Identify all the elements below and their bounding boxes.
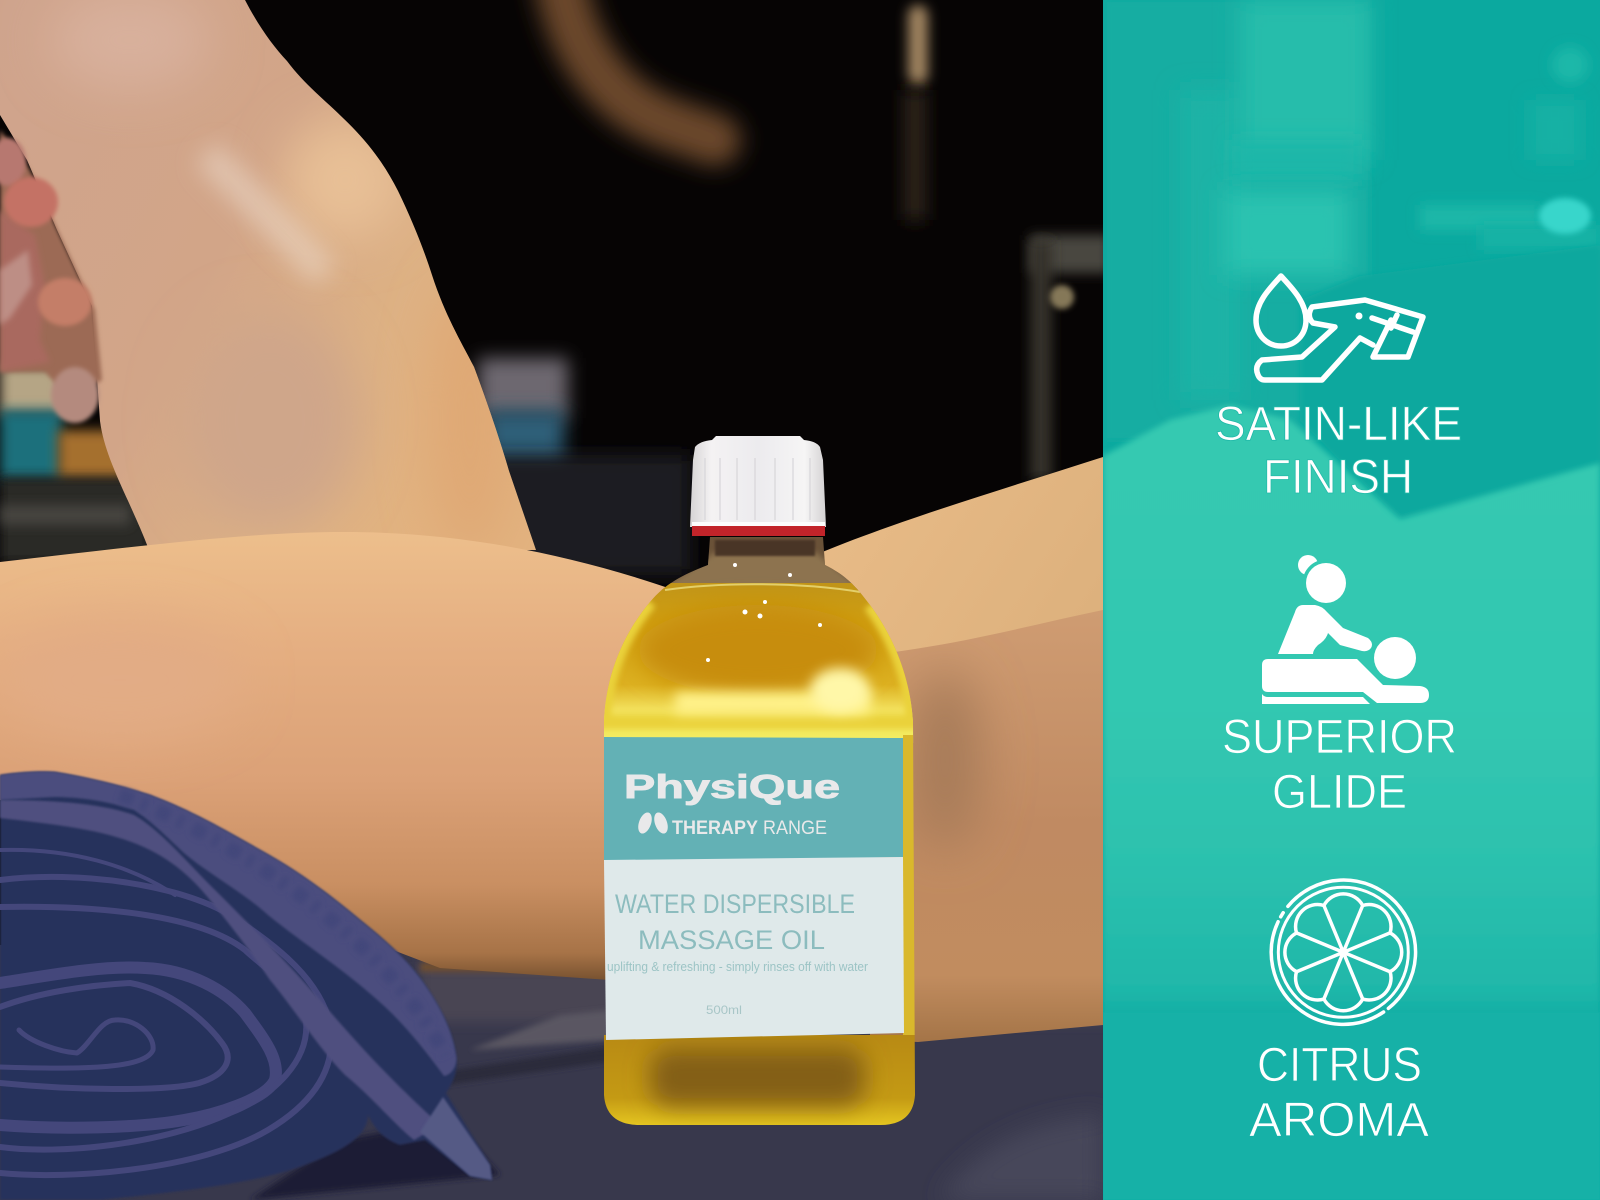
label: brand band	[604, 737, 903, 862]
towel roll folds	[0, 850, 331, 1175]
massage table	[0, 945, 1120, 1200]
photo: massage scene with oil bottle	[0, 0, 1120, 1200]
thigh in the foreground	[0, 525, 690, 1005]
icon: oil drop over hand	[1256, 276, 1423, 380]
towel top flap	[0, 772, 456, 1076]
benefit: satin-like finish	[1215, 276, 1462, 504]
towel edge fold	[0, 800, 440, 1140]
oil bottle	[600, 436, 920, 1130]
bottle glass and oil	[600, 530, 920, 1130]
panel: product benefits	[1103, 0, 1600, 1200]
panel background	[1103, 0, 1600, 1200]
blurred dark studio background	[0, 0, 1110, 600]
icon: hands	[638, 812, 668, 834]
benefit: citrus aroma	[1249, 880, 1429, 1147]
label: product panel	[604, 857, 904, 1040]
icon: massage therapist and client	[1262, 555, 1429, 704]
icon: citrus slice	[1271, 880, 1416, 1024]
product description: uplifting & refreshing - simply rinses off with water	[607, 959, 869, 974]
heading: glide: GLIDE	[1272, 766, 1407, 819]
product name: WATER DISPERSIBLE	[615, 889, 855, 919]
lower leg, right of bottle	[820, 457, 1110, 1050]
benefit: superior glide	[1222, 555, 1457, 819]
upper leg	[0, 0, 560, 560]
rolled navy towel	[0, 772, 492, 1200]
heading: superior: SUPERIOR	[1222, 711, 1457, 764]
range name: THERAPY RANGE	[672, 818, 827, 839]
heading: aroma: AROMA	[1249, 1094, 1429, 1147]
bottle cap	[690, 436, 826, 536]
volume: 500ml	[706, 1003, 742, 1017]
brand name: PhysiQue	[624, 768, 840, 805]
heading: satin-like: SATIN-LIKE	[1215, 398, 1462, 451]
heading: citrus: CITRUS	[1257, 1039, 1422, 1092]
hand gripping leg	[0, 130, 102, 423]
heading: finish: FINISH	[1263, 451, 1413, 504]
product name line 2: MASSAGE OIL	[638, 925, 825, 955]
